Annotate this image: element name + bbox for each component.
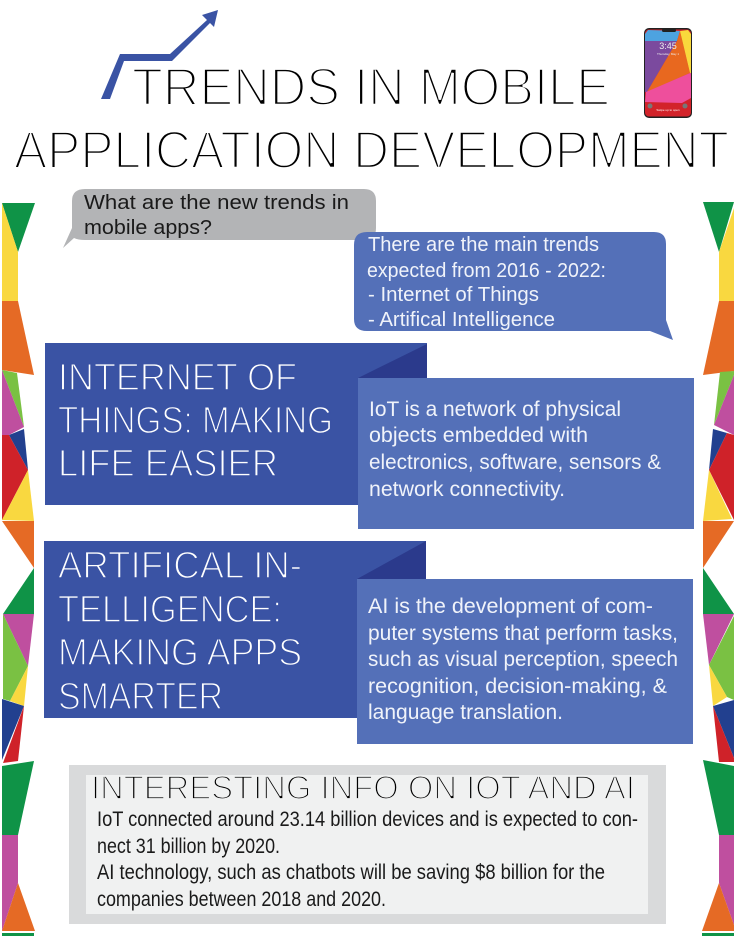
heading: interesting info: INTERESTING INFO ON IOT AND AI [91,769,635,806]
text block: AI definition [357,579,693,744]
heading panel: artificial intelligence: ARTIFICAL IN- [58,545,302,587]
speech bubble: question: mobile apps? [84,217,212,239]
text block: AI definition: AI is the development of com- [368,595,653,618]
left decorative strip [2,203,35,936]
text block: facts: nect 31 billion by 2020. [97,835,280,858]
icon: smartphone [644,28,692,118]
text block: facts [97,808,638,911]
speech bubble: answer: expected from 2016 - 2022: [367,260,606,282]
text block: IoT definition: objects embedded with [369,424,588,447]
heading panel: internet of things: INTERNET OF [58,357,297,399]
text block: AI definition: puter systems that perform tasks, [368,622,678,645]
heading panel: artificial intelligence: SMARTER [58,676,223,718]
icon: smartphone: Thursday, May 1 [657,52,679,56]
icon: smartphone: 3:45 [659,41,677,51]
text block: IoT definition: electronics, software, sensors & [369,451,661,474]
speech bubble: question [63,189,376,248]
heading panel: artificial intelligence [44,541,426,718]
heading panel: internet of things: LIFE EASIER [58,443,278,485]
panel: internet of things [45,343,694,529]
speech bubble: answer: - Internet of Things [368,284,539,306]
text block: IoT definition: IoT is a network of physical [369,398,621,421]
right decorative strip [702,202,734,936]
heading panel: internet of things: THINGS: MAKING [58,400,333,442]
speech bubble: question: What are the new trends in [84,192,349,214]
text block: AI definition: such as visual perception, speech [368,648,678,671]
text block: IoT definition: network connectivity. [369,478,565,501]
text block: facts: AI technology, such as chatbots will be saving $8 billion for the [97,861,605,884]
panel: interesting info [69,765,666,924]
heading panel: internet of things [45,343,427,505]
speech bubble: answer: There are the main trends [368,234,599,256]
heading panel: artificial intelligence: MAKING APPS [58,632,302,674]
text block: AI definition: language translation. [368,701,563,724]
icon: smartphone: Swipe up to open [656,108,680,112]
panel: artificial intelligence [44,541,693,744]
text block: facts: IoT connected around 23.14 billion devices and is expected to con- [97,808,638,831]
text block: AI definition: recognition, decision-making, & [368,675,667,698]
speech bubble: answer: - Artifical Intelligence [368,309,555,331]
text block: IoT definition [358,378,694,529]
title [14,58,729,180]
speech bubble: answer [354,232,673,340]
text block: facts: companies between 2018 and 2020. [97,888,386,911]
icon: rising arrow [101,10,218,99]
title: TRENDS IN MOBILE [132,58,610,117]
heading panel: artificial intelligence: TELLIGENCE: [58,589,282,631]
